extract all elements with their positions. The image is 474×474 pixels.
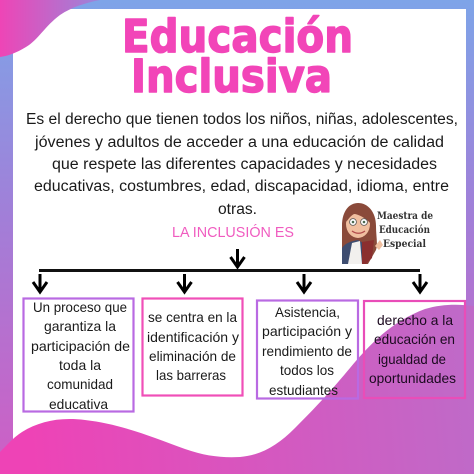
- brand label: [377, 210, 433, 250]
- box 1: proceso: [24, 298, 134, 412]
- box 1: proceso: participación de: [31, 338, 130, 354]
- box 1: proceso: Un proceso que: [33, 299, 127, 315]
- box 3: asistencia: estudiantes: [269, 382, 338, 398]
- intro paragraph: otras.: [218, 201, 257, 218]
- arrow: to box 1: [33, 274, 47, 292]
- intro paragraph: jóvenes y adultos de acceder a una educación de calidad: [34, 134, 444, 151]
- box 2: barreras: eliminación de: [149, 348, 236, 364]
- brand label: Especial: [383, 238, 426, 250]
- intro paragraph: [26, 111, 458, 218]
- arrow: to box 3: [297, 274, 311, 292]
- box 4: derecho: oportunidades: [369, 370, 456, 386]
- subheading: LA INCLUSIÓN ES: [172, 224, 294, 241]
- icon: teacher avatar: [342, 203, 383, 264]
- box 2: barreras: [142, 298, 242, 396]
- box 2: barreras: identificación y: [147, 329, 239, 345]
- arrow: to box 4: [413, 274, 427, 292]
- box 3: asistencia: Asistencia,: [275, 304, 340, 320]
- top-left decorative blob: [0, 0, 100, 57]
- connector bar: [39, 269, 420, 272]
- box 4: derecho: igualdad de: [378, 351, 446, 367]
- title: [122, 10, 353, 103]
- arrow: to box 2: [178, 274, 192, 292]
- box 1: proceso: comunidad: [47, 376, 113, 392]
- brand label: Maestra de: [377, 210, 433, 222]
- box 4: derecho: [364, 301, 465, 398]
- box 3: asistencia: [257, 300, 358, 398]
- box 4: derecho: educación en: [374, 331, 455, 347]
- box 3: asistencia: todos los: [280, 362, 334, 378]
- arrow: centre down: [230, 249, 244, 267]
- box 1: proceso: toda la: [59, 357, 101, 373]
- intro paragraph: Es el derecho que tienen todos los niños, niñas, adolescentes,: [26, 111, 458, 128]
- box 3: asistencia: participación y: [262, 323, 352, 339]
- title: Inclusiva: [131, 50, 332, 103]
- box 3: asistencia: rendimiento de: [262, 343, 352, 359]
- intro paragraph: educativas, costumbres, edad, discapacidad, idioma, entre: [34, 178, 449, 195]
- brand label: Educación: [379, 224, 430, 236]
- box 2: barreras: se centra en la: [148, 309, 237, 325]
- box 4: derecho: derecho a la: [377, 312, 453, 328]
- box 1: proceso: garantiza la: [44, 318, 116, 334]
- box 1: proceso: educativa: [49, 396, 108, 412]
- title: Educación: [122, 10, 353, 63]
- bottom wave: [0, 305, 474, 474]
- box 2: barreras: las barreras: [156, 367, 226, 383]
- intro paragraph: que respete las diferentes capacidades y necesidades: [52, 156, 437, 173]
